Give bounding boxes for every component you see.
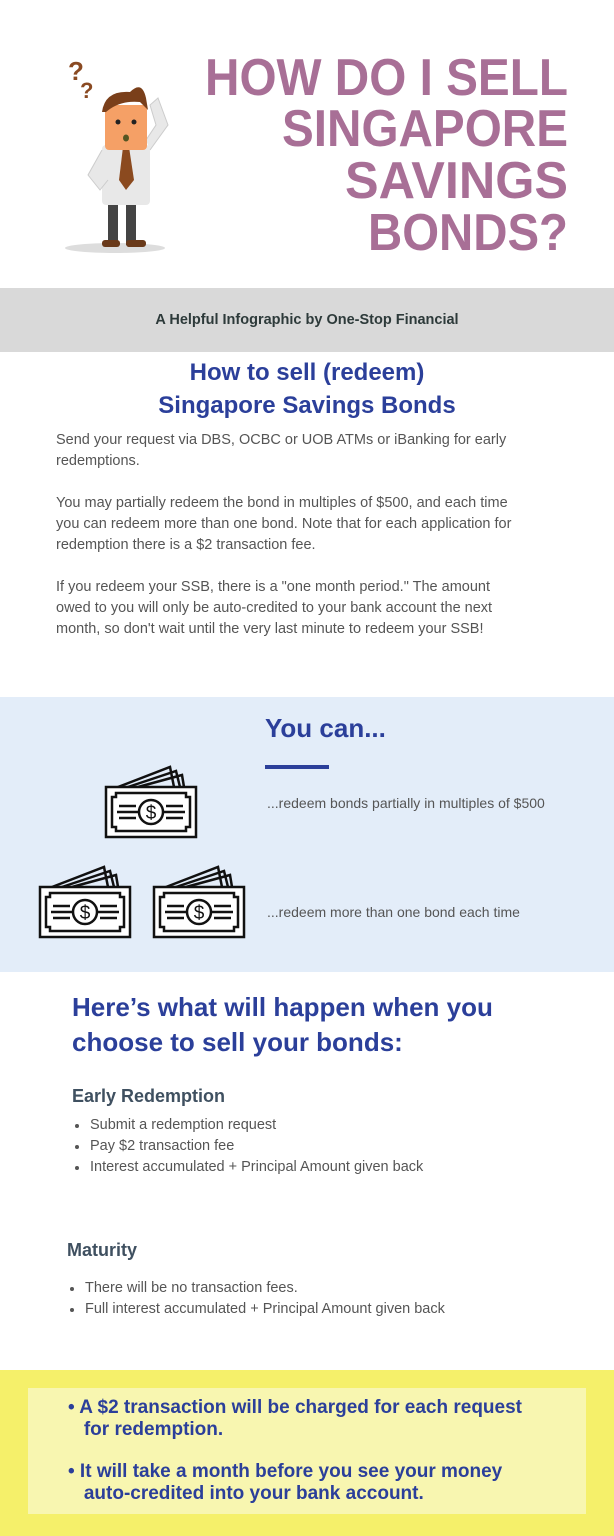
text block: intro paragraphs: You may partially redeem the bond in multiples of $500, and each time xyxy=(56,495,508,511)
heading: what will happen: Here’s what will happen when you xyxy=(72,992,493,1022)
text block: intro paragraphs xyxy=(56,432,512,637)
text block: intro paragraphs: redemptions. xyxy=(56,453,140,469)
icon: two bills: $ xyxy=(80,903,91,924)
section heading: how to sell: Singapore Savings Bonds xyxy=(158,392,456,419)
header character xyxy=(65,56,168,253)
text block: intro paragraphs: owed to you will only be auto-credited to your bank account the next xyxy=(56,600,492,616)
list: key notes: auto-credited into your bank account. xyxy=(84,1483,424,1504)
text block: intro paragraphs: month, so don't wait until the very last minute to redeem your SSB! xyxy=(56,621,484,637)
title xyxy=(205,49,568,260)
text block: intro paragraphs: Send your request via DBS, OCBC or UOB ATMs or iBanking for early xyxy=(56,432,506,448)
heading: what will happen xyxy=(72,992,493,1057)
subheading: early redemption: Early Redemption xyxy=(72,1086,225,1106)
subtitle band: A Helpful Infographic by One-Stop Financial xyxy=(155,312,459,328)
list: early redemption: Submit a redemption request xyxy=(90,1117,276,1133)
icon: two bills xyxy=(38,865,246,938)
text block: intro paragraphs: redemption there is a $2 transaction fee. xyxy=(56,537,316,553)
list: early redemption xyxy=(75,1117,424,1175)
list: key notes xyxy=(68,1397,522,1504)
panel: you can xyxy=(0,697,614,972)
title: SAVINGS xyxy=(345,152,568,210)
subtitle band xyxy=(0,288,614,352)
text block: intro paragraphs: If you redeem your SSB, there is a "one month period." The amount xyxy=(56,579,490,595)
list: key notes: • It will take a month before you see your money xyxy=(68,1461,502,1482)
text: partial: ...redeem bonds partially in multiples of $500 xyxy=(267,795,545,811)
icon: single bill xyxy=(104,765,198,838)
text: more than one: ...redeem more than one bond each time xyxy=(267,904,520,920)
icon: single bill: $ xyxy=(146,803,157,824)
icon: two bills: $ xyxy=(194,903,205,924)
heading: you can: You can... xyxy=(265,713,386,743)
section heading: how to sell xyxy=(158,359,456,419)
header character: ? xyxy=(68,56,84,86)
list: key notes: • A $2 transaction will be charged for each request xyxy=(68,1397,522,1418)
list: maturity: There will be no transaction fees. xyxy=(85,1280,298,1296)
list: early redemption: Pay $2 transaction fee xyxy=(90,1138,234,1154)
list: maturity xyxy=(70,1280,445,1317)
text block: intro paragraphs: you can redeem more than one bond. Note that for each application for xyxy=(56,516,511,532)
header character: ? xyxy=(80,78,93,103)
section heading: how to sell: How to sell (redeem) xyxy=(190,359,424,386)
list: early redemption: Interest accumulated + Principal Amount given back xyxy=(90,1159,423,1175)
panel: key notes xyxy=(0,1370,614,1536)
list: key notes: for redemption. xyxy=(84,1419,223,1440)
list: maturity: Full interest accumulated + Principal Amount given back xyxy=(85,1301,445,1317)
heading: what will happen: choose to sell your bonds: xyxy=(72,1027,403,1057)
subheading: maturity: Maturity xyxy=(67,1240,137,1260)
